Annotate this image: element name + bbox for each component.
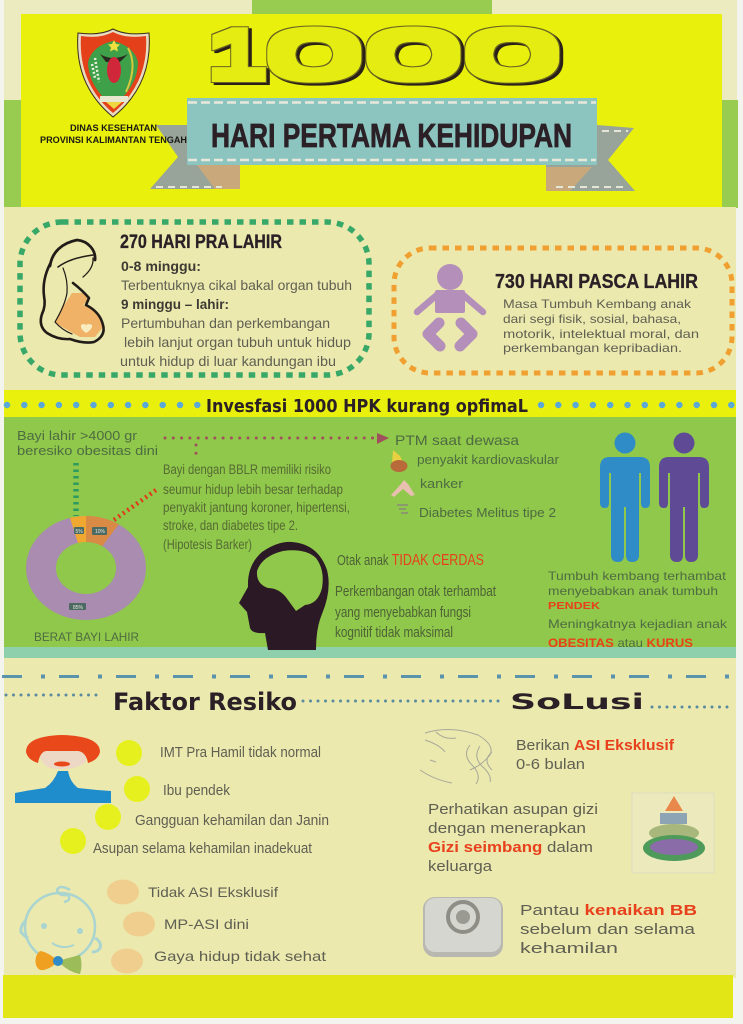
description: Pertumbuhan dan perkembangan <box>121 315 330 331</box>
text: BBLR: seumur hidup lebih besar terhadap <box>163 482 343 497</box>
text: otak anak: Otak anak TIDAK CERDAS <box>337 552 484 569</box>
text: bayi lahir 4000 gr <box>17 429 158 458</box>
text: tumbuh kembang: menyebabkan anak tumbuh <box>548 584 718 598</box>
panel: 270 hari pra lahir <box>20 222 369 375</box>
text: otak anak: yang menyebabkan fungsi <box>335 605 471 621</box>
risk bullets: baby <box>107 880 155 974</box>
text: bayi lahir 4000 gr: beresiko obesitas dini <box>17 444 158 458</box>
text: tumbuh kembang: Tumbuh kembang terhambat <box>548 569 727 583</box>
icon: breastfeeding sketch <box>420 729 492 784</box>
text: kenaikan BB: kehamilan <box>520 941 618 957</box>
text: PTM list: penyakit kardiovaskular <box>417 453 559 467</box>
icon: head with brain <box>239 542 329 650</box>
text: kenaikan BB <box>520 903 697 957</box>
dotted connectors <box>76 438 378 520</box>
logo caption: PROVINSI KALIMANTAN TENGAH <box>40 135 187 146</box>
donut chart: 10% <box>95 529 106 535</box>
risk bullets: mother <box>60 740 150 854</box>
text: BBLR: penyakit jantung koroner, hipertensi, <box>163 500 350 515</box>
text: BBLR: (Hipotesis Barker) <box>163 537 252 552</box>
text: PTM list <box>395 432 559 520</box>
risk text: baby: MP-ASI dini <box>164 916 249 932</box>
donut chart <box>41 516 131 611</box>
text: PTM list: kanker <box>420 477 463 491</box>
text: gizi seimbang <box>428 802 598 875</box>
heading: 730 HARI PASCA LAHIR <box>495 271 698 293</box>
risk text: baby: Tidak ASI Eksklusif <box>148 884 278 900</box>
text: ASI: Berikan ASI Eksklusif <box>516 738 674 754</box>
text: ASI <box>516 738 674 773</box>
risk text: mother: Gangguan kehamilan dan Janin <box>135 813 329 829</box>
icon: provincial shield logo <box>78 29 149 117</box>
risk text: mother: Ibu pendek <box>163 783 231 799</box>
panel: investasi content <box>4 417 736 658</box>
description: Masa Tumbuh Kembang anak <box>503 297 692 311</box>
description: lebih lanjut organ tubuh untuk hidup <box>124 334 351 350</box>
dashed divider <box>2 675 730 678</box>
icon: baby <box>417 264 483 346</box>
arrow <box>377 433 389 444</box>
icon: blue person <box>600 432 650 562</box>
text: gizi seimbang: dengan menerapkan <box>428 821 586 837</box>
donut chart: 5% <box>76 529 83 535</box>
icon: food pyramid <box>632 793 714 873</box>
text: kenaikan BB: Pantau kenaikan BB <box>520 903 697 919</box>
text: BBLR: Bayi dengan BBLR memiliki risiko <box>163 462 331 477</box>
icon: diabetes <box>397 505 408 513</box>
icon: baby with bow tie <box>21 887 100 974</box>
description: 9 minggu – lahir: <box>121 296 229 312</box>
text: otak anak: kognitif tidak maksimal <box>335 625 453 641</box>
description: 0-8 minggu: <box>121 258 201 274</box>
text: gizi seimbang: Gizi seimbang dalam <box>428 840 593 856</box>
description <box>503 297 699 355</box>
description: Terbentuknya cikal bakal organ tubuh <box>121 277 352 293</box>
icon: heart disease <box>390 450 408 472</box>
logo caption: DINAS KESEHATAN <box>70 123 157 134</box>
risk text: mother <box>93 745 329 857</box>
description <box>120 258 352 369</box>
icon: weighing scale <box>423 897 503 957</box>
logo caption <box>40 123 187 146</box>
heading: SoLusi <box>510 690 644 714</box>
text: BBLR: stroke, dan diabetes tipe 2. <box>163 518 298 533</box>
text: kenaikan BB: sebelum dan selama <box>520 922 696 938</box>
ribbon banner <box>150 98 635 191</box>
heading: Invesfasi 1000 HPK kurang opfimaL <box>206 396 528 417</box>
panel: header <box>21 14 722 207</box>
dotted heading rules <box>6 695 505 701</box>
description: dari segi fisik, sosial, bahasa, <box>503 312 681 326</box>
icon: pregnant woman <box>41 240 104 343</box>
panel: 730 hari pasca lahir <box>394 248 732 373</box>
risk text: baby <box>148 884 326 964</box>
text: tumbuh kembang: OBESITAS atau KURUS <box>548 636 693 650</box>
text: tumbuh kembang <box>548 569 728 650</box>
text: otak anak: Perkembangan otak terhambat <box>335 584 496 600</box>
text: PTM list: PTM saat dewasa <box>395 432 519 448</box>
text: BBLR <box>163 462 350 552</box>
heading: 270 HARI PRA LAHIR <box>120 232 282 253</box>
text: ASI: 0-6 bulan <box>516 757 585 773</box>
panel: solusi <box>420 690 732 957</box>
icon: purple person <box>659 432 709 562</box>
text: tumbuh kembang: Meningkatnya kejadian anak <box>548 617 728 631</box>
text: otak anak <box>335 552 496 641</box>
risk text: mother: Asupan selama kehamilan inadekuat <box>93 841 312 857</box>
panel: investasi heading band <box>4 390 736 418</box>
icon: mother <box>15 735 111 803</box>
description: perkembangan kepribadian. <box>503 341 682 355</box>
dotted heading rule <box>652 706 732 708</box>
heading: Faktor Resiko <box>113 688 297 716</box>
risk text: mother: IMT Pra Hamil tidak normal <box>160 745 321 761</box>
text: PTM list: Diabetes Melitus tipe 2 <box>419 506 556 520</box>
text: bayi lahir 4000 gr: Bayi lahir >4000 gr <box>17 429 137 443</box>
title number 1000: 1 <box>205 17 269 92</box>
text: gizi seimbang: Perhatikan asupan gizi <box>428 802 598 818</box>
description: untuk hidup di luar kandungan ibu <box>120 353 336 369</box>
panel: faktor resiko <box>6 688 505 974</box>
chart caption: BERAT BAYI LAHIR <box>34 630 139 644</box>
text: gizi seimbang: keluarga <box>428 859 493 875</box>
title number 1000: 000 <box>260 17 567 93</box>
description: motorik, intelektual moral, dan <box>503 327 699 341</box>
icon: cancer ribbon <box>391 480 415 497</box>
text: tumbuh kembang: PENDEK <box>548 600 600 612</box>
banner title: HARI PERTAMA KEHIDUPAN <box>211 117 572 154</box>
risk text: baby: Gaya hidup tidak sehat <box>154 948 326 964</box>
donut chart: 85% <box>73 605 84 611</box>
